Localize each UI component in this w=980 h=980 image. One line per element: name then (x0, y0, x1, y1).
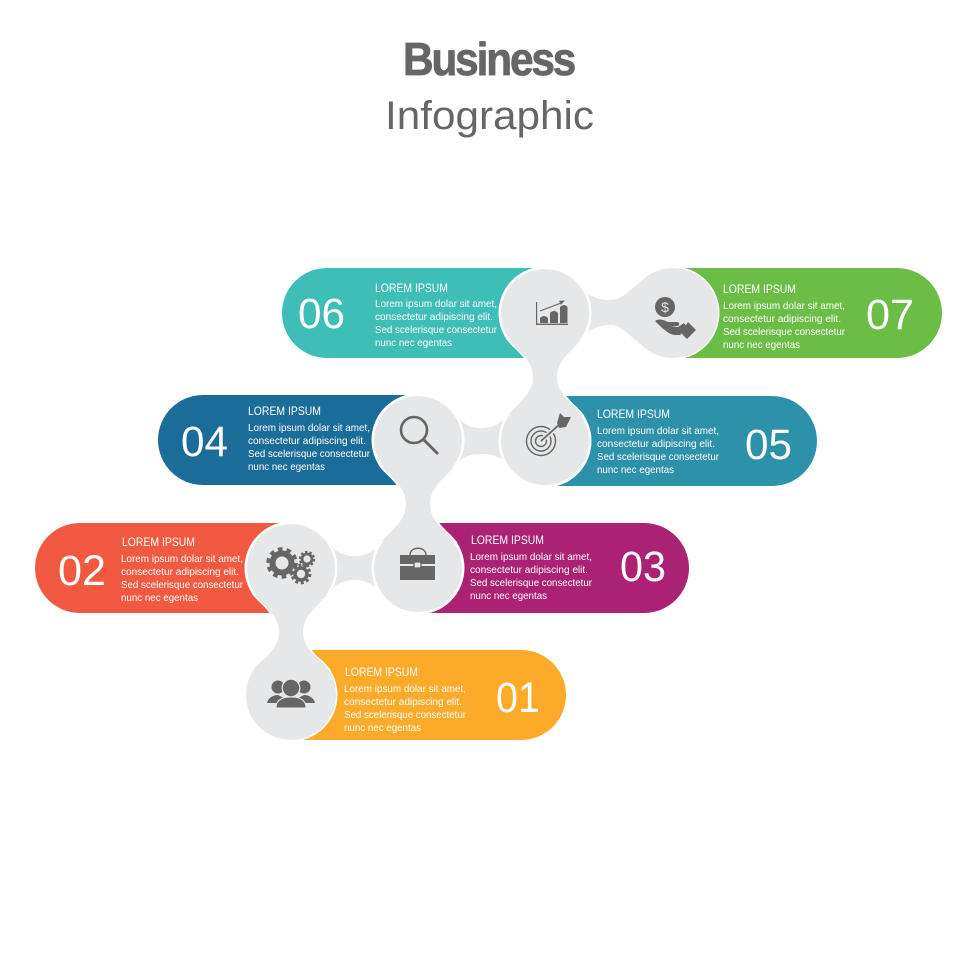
text: 02: consectetur adipiscing elit. (121, 567, 239, 578)
text: 07: 07 (866, 291, 914, 339)
node: briefcase (374, 524, 462, 612)
text: 01: consectetur adipiscing elit. (344, 697, 462, 708)
node: gears (247, 524, 335, 612)
panel: 05 bar (545, 396, 817, 486)
icon: target with arrow (526, 413, 571, 456)
connector: flare into hand node (611, 282, 640, 344)
text: 01: nunc nec egentas (344, 723, 421, 734)
node: target (501, 397, 589, 485)
icon: dollar in hand (655, 297, 696, 339)
text: 06: 06 (298, 290, 345, 338)
icon: bar chart (536, 300, 568, 325)
text: 02 (58, 535, 243, 604)
connector: chart to target (509, 340, 581, 414)
panel: 06 bar (282, 268, 545, 358)
text: 02: nunc nec egentas (121, 593, 198, 604)
icon: dollar in hand: $ (661, 299, 669, 315)
text: 01: LOREM IPSUM (345, 665, 418, 679)
text: 06: consectetur adipiscing elit. (375, 312, 493, 323)
text: 05 (597, 407, 792, 476)
text: 03 (470, 533, 666, 602)
text: 04: Sed scelerisque consectetur (248, 449, 370, 460)
title: Business (403, 34, 575, 85)
icon: magnifier (401, 417, 438, 454)
connector: magnifier to target (452, 412, 512, 468)
text: 05: LOREM IPSUM (597, 407, 670, 421)
text: 05: consectetur adipiscing elit. (597, 439, 715, 450)
text: 02: 02 (58, 547, 106, 595)
panel: 02 bar (35, 523, 291, 613)
text: 06: nunc nec egentas (375, 338, 452, 349)
text: 02: Lorem ipsum dolar sit amet, (121, 554, 243, 565)
panel: 04 bar (158, 395, 418, 485)
text: 05: Lorem ipsum dolar sit amet, (597, 426, 719, 437)
text: 07: nunc nec egentas (723, 340, 800, 351)
title (385, 34, 594, 138)
text: 03: Sed scelerisque consectetur (470, 578, 592, 589)
text: 03: 03 (620, 543, 666, 591)
text: 07: consectetur adipiscing elit. (723, 314, 841, 325)
text: 07: Lorem ipsum dolar sit amet, (723, 301, 845, 312)
panel: 07 bar (673, 268, 942, 358)
panel: 01 bar (291, 650, 566, 740)
text: 05: nunc nec egentas (597, 465, 674, 476)
text: 07 (723, 282, 914, 351)
text: 03: Lorem ipsum dolar sit amet, (470, 552, 592, 563)
text: 06: Sed scelerisque consectetur (375, 325, 497, 336)
panel: 03 bar (418, 523, 689, 613)
text: 04: 04 (181, 418, 228, 466)
text: 06: Lorem ipsum dolar sit amet, (375, 299, 497, 310)
node: chart (501, 269, 589, 357)
text: 01 (344, 665, 540, 734)
text: 07: LOREM IPSUM (723, 282, 796, 296)
text: 07: Sed scelerisque consectetur (723, 327, 845, 338)
text: 05: 05 (745, 421, 792, 469)
text: 01: 01 (496, 674, 540, 722)
text: 04: consectetur adipiscing elit. (248, 436, 366, 447)
connector: chart to hand (580, 282, 640, 344)
text: 06: LOREM IPSUM (375, 281, 448, 295)
text: 02: Sed scelerisque consectetur (121, 580, 243, 591)
text: 04: LOREM IPSUM (248, 404, 321, 418)
title: Infographic (385, 94, 594, 138)
text: 04: Lorem ipsum dolar sit amet, (248, 423, 370, 434)
text: 01: Sed scelerisque consectetur (344, 710, 466, 721)
text: 04: nunc nec egentas (248, 462, 325, 473)
icon: briefcase (400, 548, 435, 580)
connector: gears to briefcase (325, 540, 385, 596)
connector: magnifier to briefcase (382, 467, 454, 541)
node: hand (628, 268, 718, 358)
text: 04 (181, 404, 370, 473)
text: 03: consectetur adipiscing elit. (470, 565, 588, 576)
icon: gears (268, 550, 314, 583)
icon: people (267, 679, 315, 708)
connector: gears to people (255, 595, 327, 668)
text: 05: Sed scelerisque consectetur (597, 452, 719, 463)
text: 02: LOREM IPSUM (122, 535, 195, 549)
text: 03: LOREM IPSUM (471, 533, 544, 547)
connector outline base (246, 268, 718, 740)
text: 03: nunc nec egentas (470, 591, 547, 602)
text: 06 (298, 281, 497, 349)
node: people (246, 650, 336, 740)
node: magnifier (374, 396, 462, 484)
text: 01: Lorem ipsum dolar sit amet, (344, 684, 466, 695)
